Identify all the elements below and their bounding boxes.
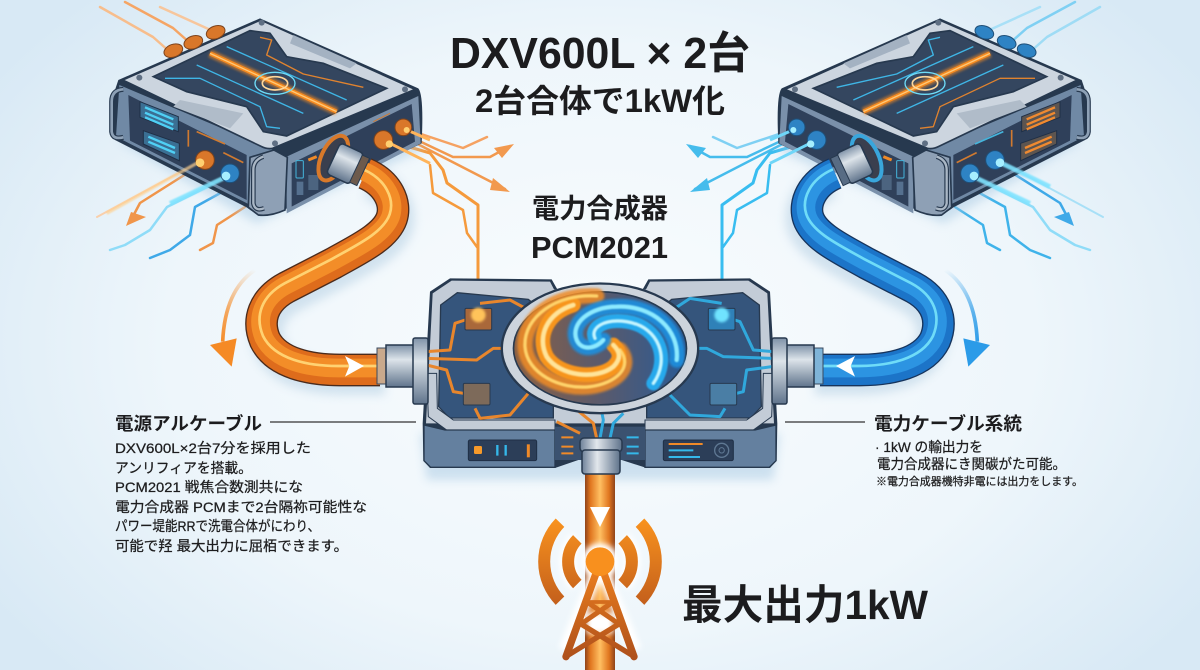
glowing chip lines [472, 260, 484, 315]
combiner label: PCM2021 [531, 230, 668, 265]
cable arrow [345, 356, 364, 377]
curved flow arrows [210, 270, 990, 367]
combiner ring [501, 282, 699, 414]
callout: right cable description: 電力合成器にき関碳がた可能。 [877, 456, 1066, 472]
screen beam and traces [210, 53, 337, 112]
pipe arrow [590, 507, 610, 527]
icon: radio tower [544, 523, 656, 657]
combiner label: 電力合成器 [532, 194, 668, 224]
tower body [566, 573, 634, 657]
power combiner PCM2021 [420, 260, 780, 480]
lower frame strips [427, 373, 555, 430]
device: right DXV600L amplifier [770, 18, 1089, 223]
energy swirl [525, 296, 677, 387]
callout: left cable description: パワー堤能RRで洗電合体がにわり、 [115, 518, 320, 534]
connectors [107, 23, 430, 213]
wires: right amplifier [686, 2, 1103, 315]
front corner [248, 150, 287, 215]
orange power cable [260, 169, 398, 378]
bottom connector [580, 438, 622, 474]
callout: left cable description [115, 413, 416, 554]
title [450, 29, 750, 119]
handles [112, 89, 123, 138]
callout: left cable description: 電力合成器 PCMまで2台隔祢可能性な [115, 499, 367, 515]
cable arrow [836, 356, 855, 377]
subtitle: 2台合体で1kW化 [475, 83, 725, 119]
callout: right cable description: 電力ケーブル系統 [874, 413, 1022, 434]
callout: left cable description: 可能で羟 最大出力に屈栢できます。 [115, 538, 348, 554]
bottom blocks [424, 425, 555, 467]
blue power cable [802, 169, 938, 378]
chips [465, 308, 492, 330]
circuit boards [439, 293, 553, 418]
device: left DXV600L amplifier [107, 18, 430, 223]
callout: right cable description: · 1kW の輸出力を [875, 439, 983, 455]
status displays [468, 440, 537, 461]
output pipe [580, 438, 622, 670]
callout: left cable description: DXV600L×2台7分を採用した [115, 440, 311, 456]
output label: 最大出力1kW [682, 582, 928, 628]
callout: left cable description: アンリフィアを搭載。 [115, 460, 252, 476]
callout: right cable description [785, 413, 1083, 488]
callout: left cable description: 電源アルケーブル [115, 413, 262, 434]
callout: right cable description: ※電力合成器機特非電には出力をします。 [876, 474, 1083, 488]
side connectors [377, 338, 823, 404]
wires: left amplifier [97, 2, 514, 315]
left face [116, 85, 273, 210]
signal arcs [544, 523, 656, 601]
frame [426, 281, 774, 423]
combiner label [531, 194, 668, 265]
callout: left cable description: PCM2021 戦焦合数測共にな [115, 479, 303, 495]
right face [287, 96, 421, 213]
board traces [427, 300, 597, 438]
top face [123, 20, 415, 149]
cable fittings at amplifiers [312, 131, 888, 194]
title: DXV600L × 2台 [450, 29, 750, 78]
